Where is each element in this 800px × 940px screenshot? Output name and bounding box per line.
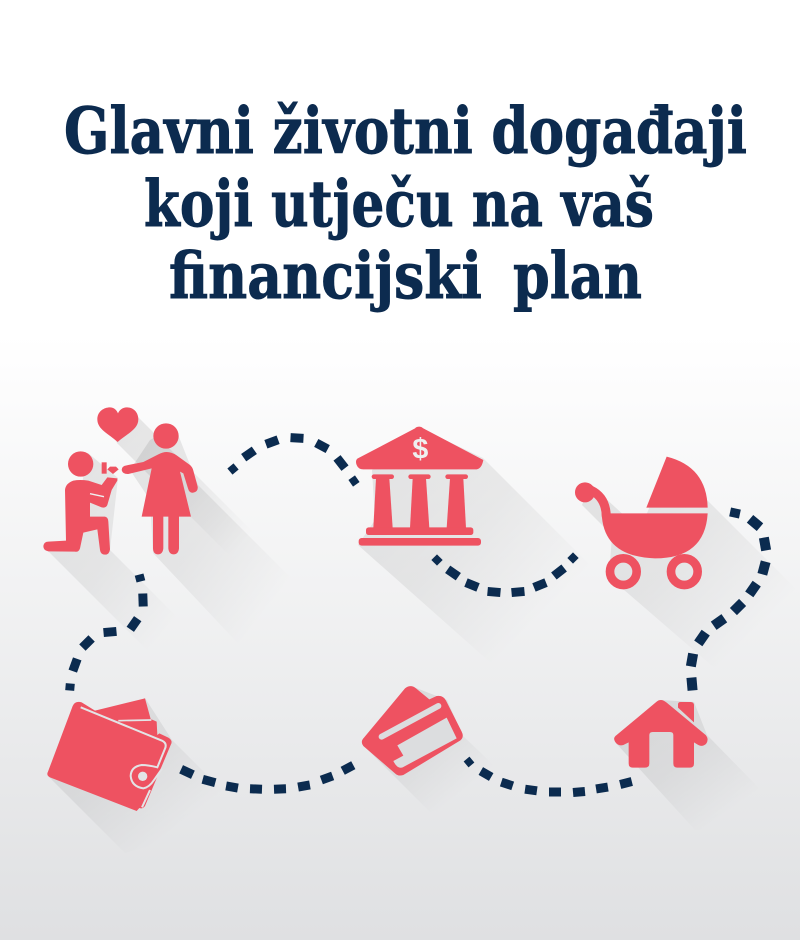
dashed path: couple to bank bbox=[227, 433, 360, 487]
dashed path: wallet to card bbox=[179, 761, 355, 794]
icon: house bbox=[614, 700, 708, 768]
dashed path: stroller to house bbox=[686, 508, 771, 691]
woman bbox=[122, 423, 198, 554]
dashed path: card to house bbox=[464, 757, 633, 797]
title bbox=[64, 94, 747, 314]
icon: credit cards bbox=[362, 686, 463, 776]
title: plan bbox=[513, 239, 642, 314]
long shadows bbox=[45, 415, 800, 853]
title: financijski bbox=[169, 239, 482, 314]
dashed path: bank to stroller bbox=[431, 552, 579, 597]
icon: proposal couple bbox=[43, 407, 198, 555]
dollar sign: $ bbox=[412, 434, 428, 466]
title: koji utječu na vaš bbox=[144, 167, 654, 242]
dashed path: couple to wallet bbox=[65, 573, 148, 691]
icon: wallet bbox=[47, 698, 172, 811]
icon: bank bbox=[356, 427, 483, 546]
icon: baby stroller bbox=[575, 457, 708, 585]
heart bbox=[97, 407, 138, 442]
kneeling man with ring bbox=[43, 451, 119, 555]
